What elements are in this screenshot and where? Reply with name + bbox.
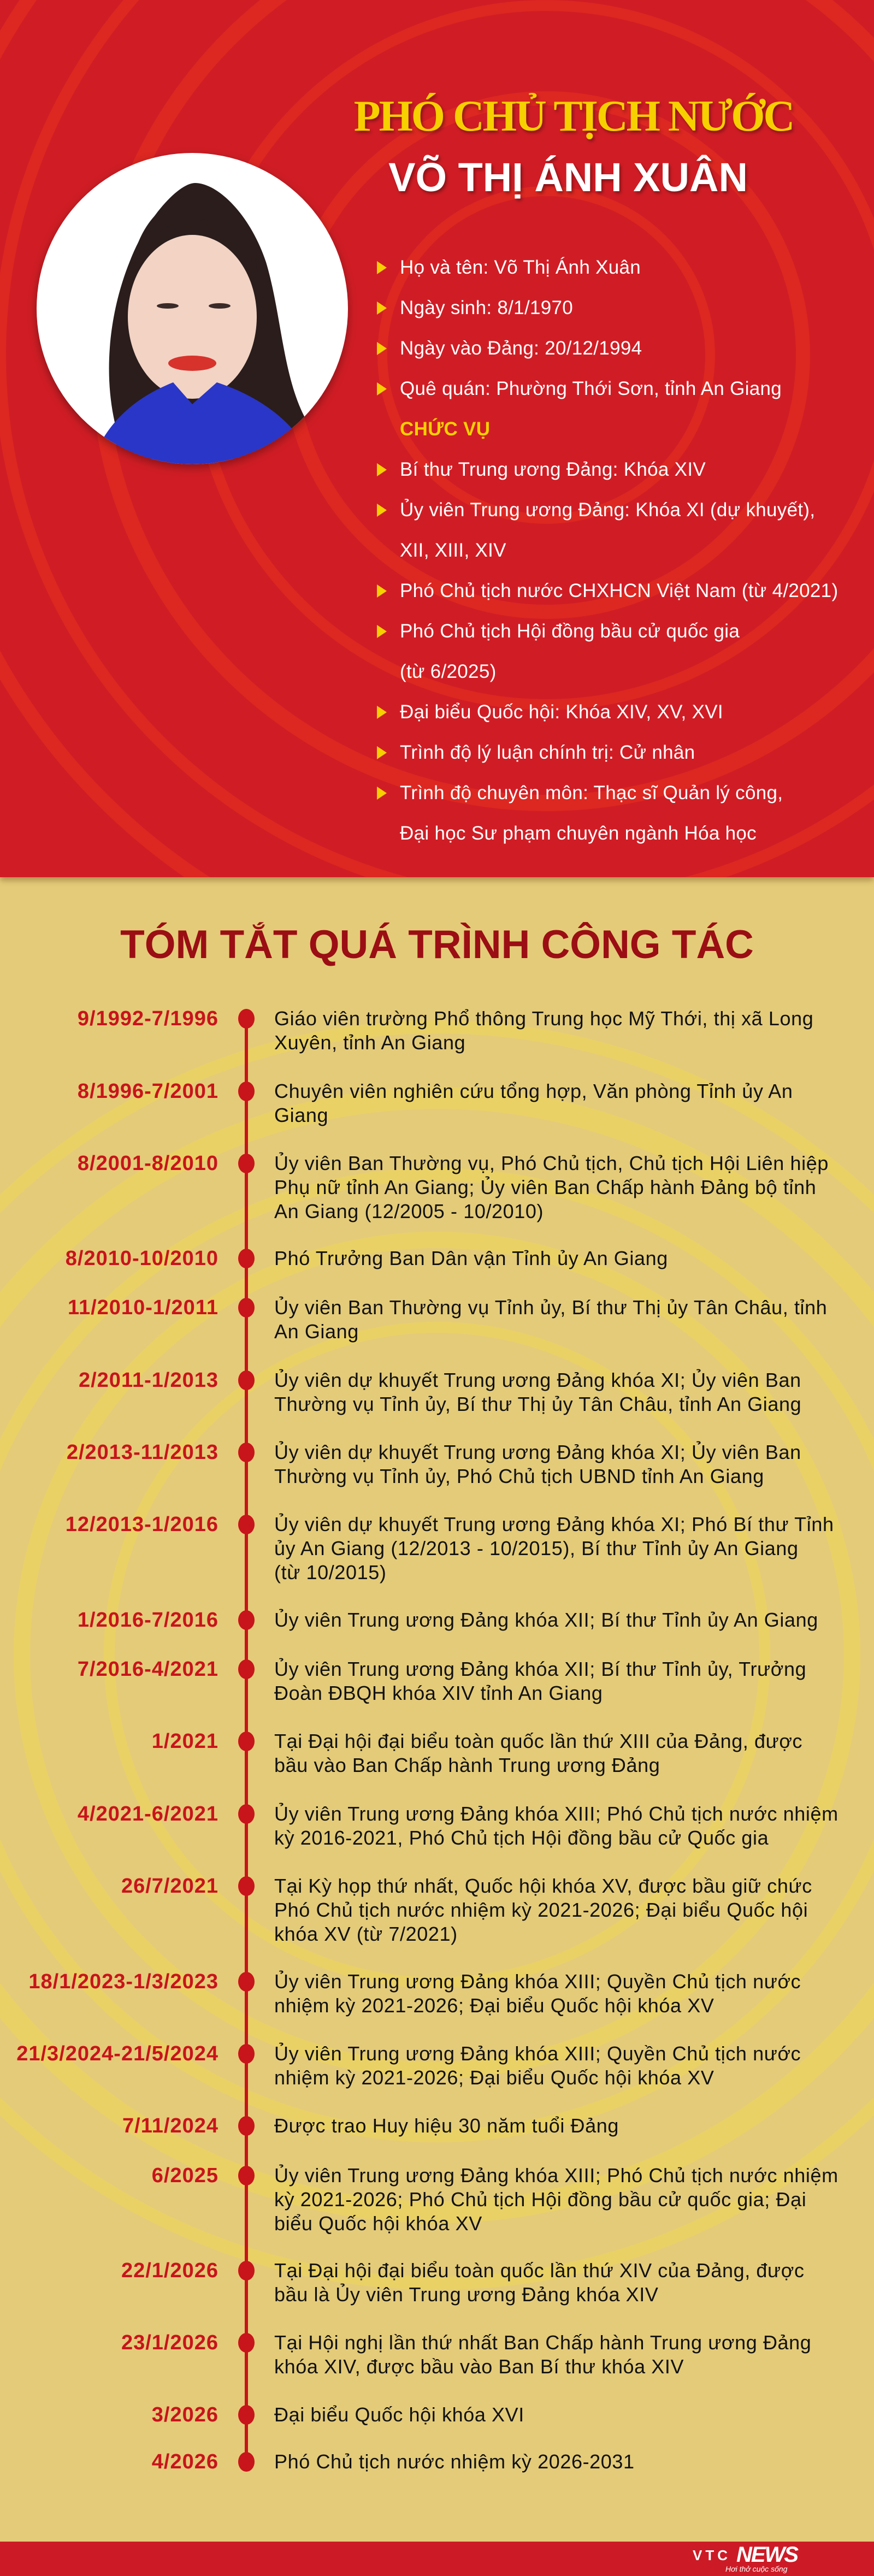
logo: VTC NEWS: VTC [693, 2547, 731, 2563]
entry 18/1/2023-1/3/2023: Ủy viên Trung ương Đảng khóa XIII; Quyền Chủ tịch nước [274, 1970, 801, 1993]
timeline: Giang [274, 1104, 328, 1126]
timeline: nhiệm kỳ 2021-2026; Đại biểu Quốc hội khóa XV [274, 1994, 714, 2017]
entry 9/1992-7/1996 [78, 1007, 813, 1054]
info: hometown [377, 378, 782, 399]
entry 2/2013-11/2013: Ủy viên dự khuyết Trung ương Đảng khóa XI; Ủy viên Ban [274, 1441, 801, 1463]
entry 7/11/2024: 7/11/2024 [122, 2114, 218, 2137]
info list: Ngày sinh: 8/1/1970 [400, 297, 573, 318]
entry 23/1/2026: 23/1/2026 [121, 2331, 218, 2354]
entry 8/2001-8/2010: 8/2001-8/2010 [78, 1152, 218, 1175]
timeline: An Giang (12/2005 - 10/2010) [274, 1200, 544, 1222]
info list: Ủy viên Trung ương Đảng: Khóa XI (dự khuyết), [400, 499, 815, 521]
timeline: Đoàn ĐBQH khóa XIV tỉnh An Giang [274, 1682, 603, 1704]
entry 11/2010-1/2011: 11/2010-1/2011 [68, 1296, 218, 1319]
entry 7/11/2024 [122, 2114, 619, 2137]
entry 11/2010-1/2011: Ủy viên Ban Thường vụ Tỉnh ủy, Bí thư Thị ủy Tân Châu, tỉnh [274, 1296, 827, 1319]
entry 2/2011-1/2013: 2/2011-1/2013 [79, 1369, 218, 1392]
timeline: nhiệm kỳ 2021-2026; Đại biểu Quốc hội khóa XV [274, 2066, 714, 2089]
entry 22/1/2026: 22/1/2026 [121, 2259, 218, 2282]
info list: Phó Chủ tịch nước CHXHCN Việt Nam (từ 4/2021) [400, 580, 838, 601]
info list: XII, XIII, XIV [400, 540, 506, 561]
entry 4/2021-6/2021: Ủy viên Trung ương Đảng khóa XIII; Phó Chủ tịch nước nhiệm [274, 1803, 838, 1825]
entry 8/1996-7/2001: 8/1996-7/2001 [78, 1080, 218, 1103]
entry 22/1/2026: Tại Đại hội đại biểu toàn quốc lần thứ XIV của Đảng, được [274, 2259, 805, 2282]
entry 18/1/2023-1/3/2023 [28, 1970, 801, 2017]
section title: TÓM TẮT QUÁ TRÌNH CÔNG TÁC [120, 923, 754, 967]
entry 22/1/2026 [121, 2259, 805, 2306]
info list: Bí thư Trung ương Đảng: Khóa XIV [400, 459, 706, 480]
entry 2/2011-1/2013: Ủy viên dự khuyết Trung ương Đảng khóa XI; Ủy viên Ban [274, 1369, 801, 1391]
entry 9/1992-7/1996: 9/1992-7/1996 [78, 1007, 218, 1030]
info: secretary [377, 459, 706, 480]
logo: VTC NEWS: NEWS [736, 2543, 798, 2567]
entry 2/2011-1/2013 [79, 1369, 801, 1415]
entry 6/2025: 6/2025 [152, 2164, 218, 2187]
entry 7/2016-4/2021 [78, 1658, 806, 1704]
entry 6/2025 [152, 2164, 838, 2235]
logo: VTC NEWS: Hơi thở cuộc sống [725, 2565, 787, 2573]
entry 3/2026: 3/2026 [152, 2403, 218, 2426]
timeline: Phó Chủ tịch nước nhiệm kỳ 2021-2026; Đại biểu Quốc hội [274, 1899, 808, 1921]
entry 7/2016-4/2021: Ủy viên Trung ương Đảng khóa XII; Bí thư Tỉnh ủy, Trưởng [274, 1658, 806, 1680]
timeline: bầu là Ủy viên Trung ương Đảng khóa XIV [274, 2283, 659, 2306]
timeline: Xuyên, tỉnh An Giang [274, 1031, 465, 1054]
timeline: bầu vào Ban Chấp hành Trung ương Đảng [274, 1754, 660, 1776]
entry 8/1996-7/2001: Chuyên viên nghiên cứu tổng hợp, Văn phòng Tỉnh ủy An [274, 1080, 793, 1102]
entry 21/3/2024-21/5/2024: Ủy viên Trung ương Đảng khóa XIII; Quyền Chủ tịch nước [274, 2042, 801, 2065]
info: name [377, 257, 641, 278]
footer bar [0, 2542, 874, 2576]
entry 4/2021-6/2021 [78, 1803, 838, 1849]
entry 8/2001-8/2010 [78, 1152, 829, 1222]
entry 3/2026 [152, 2403, 524, 2426]
entry 8/2010-10/2010: 8/2010-10/2010 [66, 1247, 218, 1270]
info list: CHỨC VỤ [400, 418, 490, 440]
info: election council [377, 621, 740, 682]
entry 26/7/2021: Tại Kỳ họp thứ nhất, Quốc hội khóa XV, được bầu giữ chức [274, 1875, 812, 1897]
info: central committee [377, 499, 815, 561]
entry 1/2021: Tại Đại hội đại biểu toàn quốc lần thứ XIII của Đảng, được [274, 1730, 802, 1752]
entry 1/2016-7/2016: Ủy viên Trung ương Đảng khóa XII; Bí thư Tỉnh ủy An Giang [274, 1609, 818, 1631]
timeline: ủy An Giang (12/2013 - 10/2015), Bí thư Tỉnh ủy An Giang [274, 1537, 799, 1559]
timeline: (từ 10/2015) [274, 1561, 386, 1584]
title: name: VÕ THỊ ÁNH XUÂN [388, 155, 748, 200]
timeline: kỳ 2021-2026; Phó Chủ tịch Hội đồng bầu cử quốc gia; Đại [274, 2188, 806, 2211]
entry 23/1/2026 [121, 2331, 811, 2378]
info: party join [377, 338, 642, 359]
info: vice president [377, 580, 838, 601]
entry 8/1996-7/2001 [78, 1080, 793, 1126]
timeline: biểu Quốc hội khóa XV [274, 2212, 482, 2235]
info: education [377, 782, 783, 844]
timeline: khóa XIV, được bầu vào Ban Bí thư khóa XIV [274, 2355, 684, 2378]
info list [377, 257, 838, 844]
entry 12/2013-1/2016: 12/2013-1/2016 [66, 1513, 218, 1536]
info list: Họ và tên: Võ Thị Ánh Xuân [400, 257, 641, 278]
entry 2/2013-11/2013: 2/2013-11/2013 [67, 1441, 218, 1464]
info list: Quê quán: Phường Thới Sơn, tỉnh An Giang [400, 378, 782, 399]
info list: Trình độ chuyên môn: Thạc sĩ Quản lý công, [400, 782, 783, 803]
entry 4/2021-6/2021: 4/2021-6/2021 [78, 1803, 218, 1825]
entry 23/1/2026: Tại Hội nghị lần thứ nhất Ban Chấp hành Trung ương Đảng [274, 2331, 811, 2354]
entry 3/2026: Đại biểu Quốc hội khóa XVI [274, 2403, 524, 2426]
entry 7/11/2024: Được trao Huy hiệu 30 năm tuổi Đảng [274, 2114, 619, 2137]
timeline [16, 1007, 838, 2473]
timeline: An Giang [274, 1320, 359, 1343]
info list: Trình độ lý luận chính trị: Cử nhân [400, 742, 695, 763]
entry 8/2010-10/2010: Phó Trưởng Ban Dân vận Tỉnh ủy An Giang [274, 1247, 668, 1269]
info list: Đại biểu Quốc hội: Khóa XIV, XV, XVI [400, 701, 723, 723]
entry 4/2026: Phó Chủ tịch nước nhiệm kỳ 2026-2031 [274, 2450, 635, 2473]
timeline: Thường vụ Tỉnh ủy, Bí thư Thị ủy Tân Châu, tỉnh An Giang [274, 1393, 801, 1415]
entry 9/1992-7/1996: Giáo viên trường Phổ thông Trung học Mỹ Thới, thị xã Long [274, 1007, 813, 1030]
timeline: khóa XV (từ 7/2021) [274, 1923, 458, 1945]
timeline: Phụ nữ tỉnh An Giang; Ủy viên Ban Chấp hành Đảng bộ tỉnh [274, 1176, 816, 1198]
info list: Phó Chủ tịch Hội đồng bầu cử quốc gia [400, 621, 740, 642]
entry 18/1/2023-1/3/2023: 18/1/2023-1/3/2023 [28, 1970, 218, 1993]
logo: VTC NEWS [693, 2543, 799, 2573]
entry 26/7/2021 [121, 1875, 812, 1945]
timeline: kỳ 2016-2021, Phó Chủ tịch Hội đồng bầu cử Quốc gia [274, 1827, 769, 1849]
info: deputy [377, 701, 723, 723]
entry 11/2010-1/2011 [68, 1296, 827, 1343]
entry 21/3/2024-21/5/2024 [16, 2042, 801, 2089]
entry 1/2016-7/2016: 1/2016-7/2016 [78, 1609, 218, 1632]
info: birth [377, 297, 573, 318]
info list: (từ 6/2025) [400, 661, 497, 682]
entry 7/2016-4/2021: 7/2016-4/2021 [78, 1658, 218, 1681]
title: position: PHÓ CHỦ TỊCH NƯỚC [354, 92, 793, 140]
entry 1/2021 [152, 1730, 802, 1776]
entry 4/2026: 4/2026 [152, 2450, 218, 2473]
entry 8/2001-8/2010: Ủy viên Ban Thường vụ, Phó Chủ tịch, Chủ tịch Hội Liên hiệp [274, 1152, 829, 1174]
entry 26/7/2021: 26/7/2021 [121, 1875, 218, 1898]
entry 8/2010-10/2010 [66, 1247, 668, 1270]
info list: Ngày vào Đảng: 20/12/1994 [400, 338, 642, 359]
entry 2/2013-11/2013 [67, 1441, 801, 1487]
info: political theory [377, 742, 695, 763]
portrait photo [37, 153, 348, 464]
timeline: Thường vụ Tỉnh ủy, Phó Chủ tịch UBND tỉnh An Giang [274, 1465, 764, 1487]
entry 12/2013-1/2016: Ủy viên dự khuyết Trung ương Đảng khóa XI; Phó Bí thư Tỉnh [274, 1513, 834, 1535]
entry 12/2013-1/2016 [66, 1513, 834, 1584]
entry 1/2021: 1/2021 [152, 1730, 218, 1753]
header panel [0, 0, 874, 877]
info list: Đại học Sư phạm chuyên ngành Hóa học [400, 823, 757, 844]
entry 6/2025: Ủy viên Trung ương Đảng khóa XIII; Phó Chủ tịch nước nhiệm [274, 2164, 838, 2187]
entry 21/3/2024-21/5/2024: 21/3/2024-21/5/2024 [16, 2042, 218, 2065]
